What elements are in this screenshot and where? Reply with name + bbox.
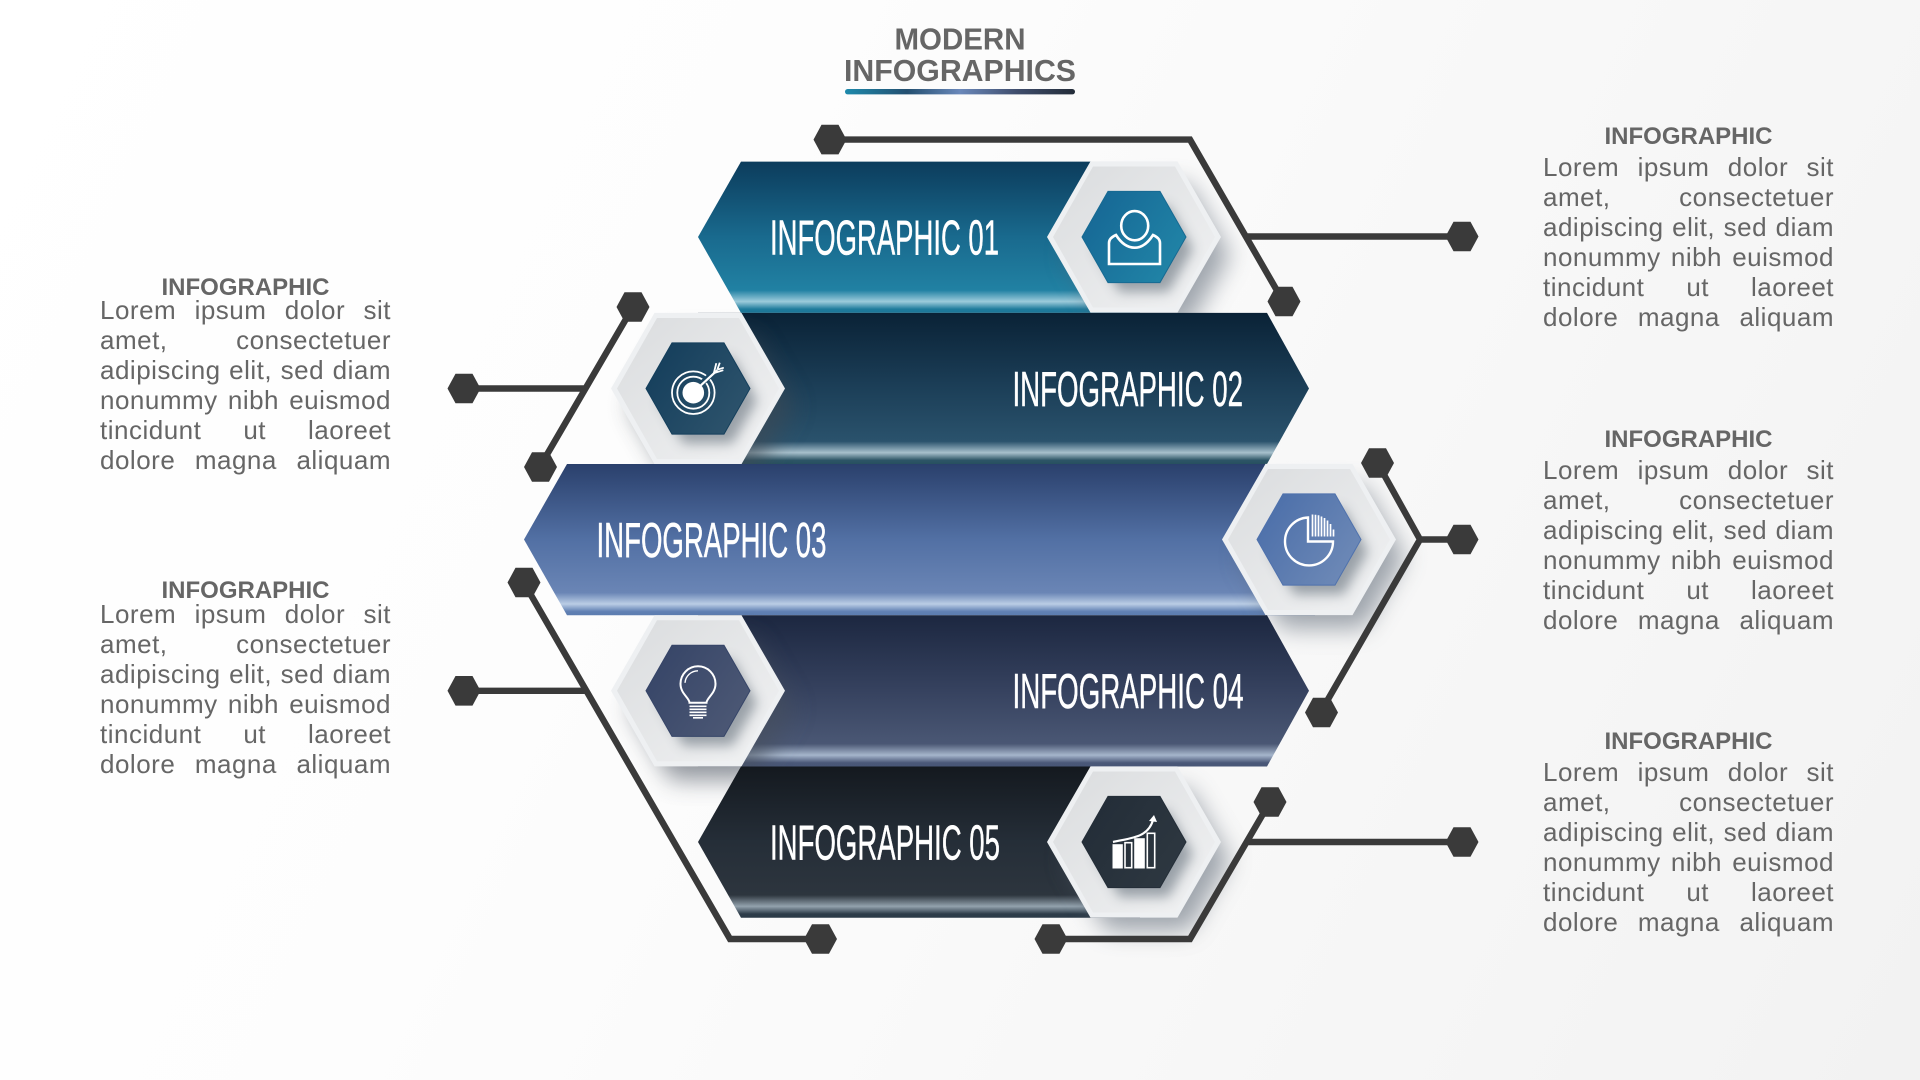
hexagon badge 05 with growth chart icon (1047, 766, 1230, 931)
text block: bottom right: dolore magna aliquam (1543, 907, 1834, 937)
text block: bottom right: tincidunt ut laoreet (1543, 877, 1834, 907)
text block: upper left: INFOGRAPHIC (162, 274, 330, 301)
text block: lower left: Lorem ipsum dolor sit (100, 599, 391, 629)
text block: lower left: tincidunt ut laoreet (100, 719, 391, 749)
text block: lower left: dolore magna aliquam (100, 749, 391, 779)
text block: upper left: dolore magna aliquam (100, 445, 391, 475)
text block: lower left (100, 577, 391, 779)
hexagon badge 01 with person icon (1047, 161, 1230, 326)
text block: top right (1543, 123, 1834, 332)
panel: band 03: INFOGRAPHIC 03 (596, 514, 826, 568)
text block: top right: adipiscing elit, sed diam (1543, 212, 1834, 242)
text block: middle right: adipiscing elit, sed diam (1543, 515, 1834, 545)
panel: band 02 (698, 313, 1309, 464)
text block: top right: nonummy nibh euismod (1543, 242, 1834, 272)
panel: band 04: INFOGRAPHIC 04 (1012, 665, 1244, 719)
text block: bottom right: Lorem ipsum dolor sit (1543, 757, 1834, 787)
text block: bottom right: amet, consectetuer (1543, 787, 1834, 817)
panel: band 04 (698, 615, 1309, 766)
text block: upper left (100, 274, 391, 475)
panel: band 02: INFOGRAPHIC 02 (1012, 363, 1243, 417)
text block: middle right: tincidunt ut laoreet (1543, 575, 1834, 605)
connector 01 (814, 125, 1478, 316)
panel: band 01: INFOGRAPHIC 01 (770, 212, 999, 266)
title (844, 22, 1076, 88)
text block: middle right: dolore magna aliquam (1543, 605, 1834, 635)
panel: band 05 (698, 766, 1140, 918)
text block: middle right: amet, consectetuer (1543, 485, 1834, 515)
text block: top right: Lorem ipsum dolor sit (1543, 152, 1834, 182)
text block: top right: dolore magna aliquam (1543, 302, 1834, 332)
connector 03 (1305, 448, 1478, 727)
text block: middle right: INFOGRAPHIC (1604, 426, 1772, 453)
text block: lower left: adipiscing elit, sed diam (100, 659, 391, 689)
text block: bottom right: nonummy nibh euismod (1543, 847, 1834, 877)
text block: top right: amet, consectetuer (1543, 182, 1834, 212)
text block: lower left: nonummy nibh euismod (100, 689, 391, 719)
title: MODERN (894, 22, 1026, 56)
text block: top right: INFOGRAPHIC (1604, 123, 1772, 150)
hexagon badge 04 with light bulb icon (611, 615, 794, 780)
text block: upper left: adipiscing elit, sed diam (100, 355, 391, 385)
connector 02 (448, 292, 650, 482)
text block: upper left: amet, consectetuer (100, 325, 391, 355)
text block: upper left: nonummy nibh euismod (100, 385, 391, 415)
panel: band 03 (524, 464, 1315, 615)
hexagon badge 02 with target icon (611, 313, 794, 478)
text block: lower left: amet, consectetuer (100, 629, 391, 659)
title underline (845, 89, 1075, 94)
connector 05 (1034, 787, 1478, 954)
text block: bottom right: adipiscing elit, sed diam (1543, 817, 1834, 847)
text block: middle right: nonummy nibh euismod (1543, 545, 1834, 575)
text block: upper left: Lorem ipsum dolor sit (100, 295, 391, 325)
panel: band 05: INFOGRAPHIC 05 (770, 816, 1000, 870)
panel: band 01 (698, 162, 1140, 313)
text block: top right: tincidunt ut laoreet (1543, 272, 1834, 302)
text block: bottom right (1543, 728, 1834, 937)
text block: middle right (1543, 426, 1834, 635)
title: INFOGRAPHICS (844, 53, 1076, 88)
text block: lower left: INFOGRAPHIC (162, 577, 330, 604)
connector 04 (448, 568, 837, 954)
text block: bottom right: INFOGRAPHIC (1604, 728, 1772, 755)
hexagon badge 03 with pie chart icon (1222, 464, 1405, 628)
text block: upper left: tincidunt ut laoreet (100, 415, 391, 445)
text block: middle right: Lorem ipsum dolor sit (1543, 455, 1834, 485)
